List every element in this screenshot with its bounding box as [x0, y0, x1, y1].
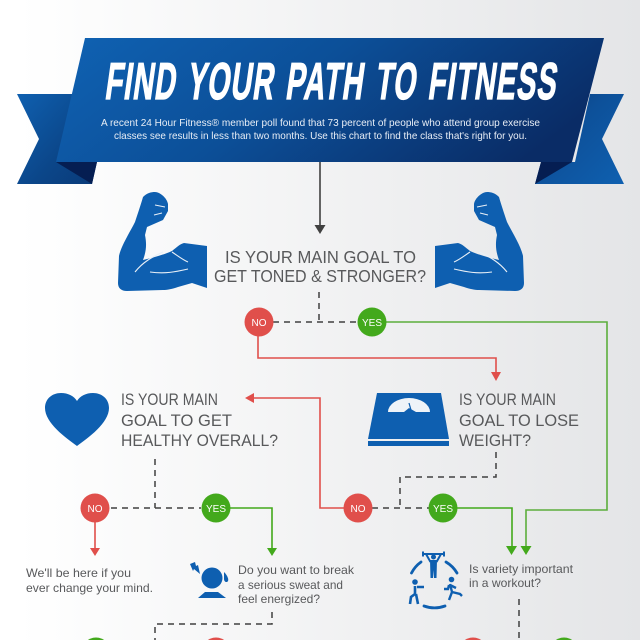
icon: left flexed arm: [118, 192, 207, 291]
question: lose weight: GOAL TO LOSE: [459, 411, 579, 430]
badge: yes, question 1: [358, 308, 386, 336]
badge: no, healthy overall: [80, 494, 110, 522]
question: healthy overall: GOAL TO GET: [121, 411, 232, 430]
ribbon left tail: [17, 94, 97, 184]
ring arcs: [412, 562, 457, 608]
question: lose weight: [459, 390, 579, 450]
icon: bathroom scale: [368, 393, 449, 446]
badge: no, question 1: [244, 308, 274, 336]
text: change your mind: [26, 566, 153, 595]
question: variety: in a workout?: [469, 576, 541, 590]
text: change your mind: ever change your mind.: [26, 581, 153, 595]
arrow: lose weight yes: [457, 508, 517, 555]
question: variety: Is variety important: [469, 562, 574, 576]
question: serious sweat: feel energized?: [238, 592, 320, 606]
badge: no, lose weight: [344, 494, 372, 522]
boxer figure: [412, 579, 418, 585]
arrow: question 1 yes: [386, 322, 607, 555]
runner figure: [449, 577, 454, 582]
question: healthy overall: [121, 390, 278, 450]
icon: sweating head: [190, 562, 228, 598]
arrow: healthy overall no: [90, 522, 100, 556]
question: lose weight: IS YOUR MAIN: [459, 390, 556, 409]
badge: no, healthy overall: NO: [88, 504, 103, 515]
weightlifter figure: [423, 552, 444, 578]
badge: no, question 1: NO: [252, 318, 267, 329]
ribbon right fold: [535, 162, 572, 184]
arrow: question 1 no: [258, 336, 501, 381]
dashed connector: variety: [518, 599, 520, 640]
badge: no, lose weight: NO: [350, 504, 366, 515]
question: healthy overall: IS YOUR MAIN: [121, 390, 218, 409]
question: serious sweat: [238, 563, 355, 606]
badge: yes, lose weight: [428, 494, 458, 522]
question: serious sweat: a serious sweat and: [238, 578, 343, 592]
dashed connector: healthy overall: [111, 459, 201, 508]
ribbon right tail: [535, 94, 624, 184]
arrow: banner to first question: [314, 162, 326, 234]
ribbon left fold: [56, 162, 97, 184]
arrow: healthy overall yes: [230, 508, 277, 556]
badges cut off at bottom edge: [82, 638, 578, 640]
banner ribbon: [17, 38, 624, 184]
intro text: A recent 24 Hour Fitness® member poll found that 73 percent of people who attend group exercise: [101, 117, 540, 129]
ribbon main band: [56, 38, 604, 162]
dashed connector: lose weight: [372, 452, 496, 508]
dashed connector: question 1: [273, 292, 358, 322]
icon: group exercise circle: [410, 552, 462, 608]
question: serious sweat: Do you want to break: [238, 563, 355, 577]
question: toned and stronger: GET TONED & STRONGER?: [214, 266, 426, 286]
question: toned and stronger: IS YOUR MAIN GOAL TO: [225, 247, 416, 267]
question: toned and stronger: [214, 247, 426, 286]
intro text: [101, 117, 540, 142]
icon: heart: [45, 393, 109, 446]
question: healthy overall: HEALTHY OVERALL?: [121, 431, 278, 450]
badge: yes, lose weight: YES: [433, 504, 453, 515]
intro text: classes see results in less than two months. Use this chart to find the class that's right for you.: [114, 130, 527, 142]
badge: yes, healthy overall: [202, 494, 230, 522]
dashed connector: serious sweat: [155, 612, 272, 640]
arrow: lose weight no: [245, 393, 345, 508]
question: lose weight: WEIGHT?: [459, 431, 531, 450]
text: change your mind: We'll be here if you: [26, 566, 131, 580]
icon: right flexed arm: [435, 192, 524, 291]
badge: yes, question 1: YES: [362, 318, 382, 329]
badge: yes, healthy overall: YES: [206, 504, 226, 515]
question: variety: [469, 562, 574, 590]
